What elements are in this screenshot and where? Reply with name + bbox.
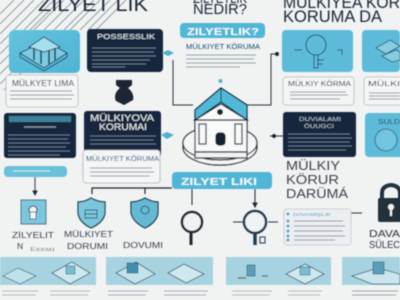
panel: blue pill <box>4 166 67 177</box>
labels: below icons: DOVUMI <box>123 240 163 250</box>
panel: bottom strip one <box>0 257 96 295</box>
heading: mülkiy körur darümá: DARÜMÁ <box>286 186 348 201</box>
panel: checklist: DAVAMIŞLIK <box>293 212 331 217</box>
labels: below icons <box>12 229 163 253</box>
panel: mülkiy box right <box>364 77 400 105</box>
icon: shield two <box>131 198 158 228</box>
icon: isometric temple <box>20 37 67 71</box>
panel: mülkiy box right: MÜLKI <box>368 79 400 88</box>
heading: mülkiy körur darümá <box>286 158 348 201</box>
label: dava sülec <box>369 228 400 251</box>
panel: mülkiy kòrma box: MÜLKIY KÖRMA <box>288 79 351 88</box>
icon: central house <box>183 88 257 165</box>
arrow: pill to keyhole <box>33 177 37 195</box>
panel: blue right lower: SULD <box>378 117 400 126</box>
icon: black urn <box>115 80 133 105</box>
icon: key <box>294 35 342 68</box>
panel: mülkyet lima: MÜLKYET LIMA <box>12 79 75 88</box>
icon: shield one <box>78 198 105 228</box>
labels: below icons: MÜLKIYET <box>64 229 113 239</box>
panel: key card <box>282 30 353 72</box>
arrow: badge to key two <box>253 189 257 207</box>
labels: below icons: Eᴇᴇᴍɪ <box>30 247 55 253</box>
labels: below icons: ZİLYELIT <box>12 230 54 240</box>
icon: padlock <box>378 185 400 222</box>
panel: mülkiyet koruma box <box>83 150 160 183</box>
panel: mülkiyova korumai <box>84 111 161 157</box>
badge: zilyet liki <box>172 172 272 189</box>
icon: connector diamond lower <box>161 132 174 139</box>
icon: keyhole card <box>21 200 46 224</box>
labels: below icons: N <box>17 241 23 251</box>
connector: badge to shields <box>92 188 172 194</box>
panel: mülkiyova korumai: MÜLKIYOVA <box>90 113 154 123</box>
icon: key one <box>182 212 202 245</box>
connector: house links <box>173 54 277 105</box>
badge: zilyet liki: ZILYET LIKI <box>181 176 257 188</box>
panel: building illustration <box>9 30 80 73</box>
panel: mülkiy kòrma box <box>283 77 354 105</box>
panel: centre text: MÜLKIYET KÖRUMA <box>186 43 260 51</box>
panel: bottom strip four <box>342 257 400 295</box>
labels: below icons: DORUMI <box>67 241 108 251</box>
title: right heading <box>283 0 400 26</box>
title: right heading: KORUMA DA <box>283 7 383 26</box>
heading: mülkiy körur darümá: KÖRUR <box>286 172 339 187</box>
panel: centre text: ZILYETLIK? <box>187 26 259 38</box>
label: dava sülec: DAVA <box>369 228 400 240</box>
panel: checklist <box>284 209 351 245</box>
arrow: badge to key one <box>191 189 193 205</box>
panel: bottom strip three <box>226 257 331 295</box>
panel: possesslik <box>87 29 163 72</box>
connector: dark panel link <box>270 135 283 137</box>
panel: mülkiyova korumai: KORUMAI <box>99 122 147 132</box>
heading: mülkiy körur darümá: MÜLKIY <box>286 158 340 173</box>
panel: mülkyet lima <box>6 75 78 107</box>
panel: dark right: DUVIALAMI <box>299 117 341 123</box>
panel: dark left lower <box>4 113 76 158</box>
panel: blue right lower <box>365 113 400 157</box>
panel: mülkiyet koruma box: MÜLKIYET KÖRUMA <box>86 154 159 163</box>
panel: dark right: ÖUUGCI <box>304 123 334 130</box>
panel: possesslik: POSSESSLIK <box>97 32 155 41</box>
panel: dark right <box>283 112 356 157</box>
panel: bottom strip two <box>106 257 213 295</box>
icon: connector diamond upper <box>162 50 174 56</box>
title: centre question: NEDIR? <box>193 1 247 18</box>
icon: key two <box>233 211 278 245</box>
panel: documents card <box>362 30 400 72</box>
panel: centre text <box>180 23 265 67</box>
